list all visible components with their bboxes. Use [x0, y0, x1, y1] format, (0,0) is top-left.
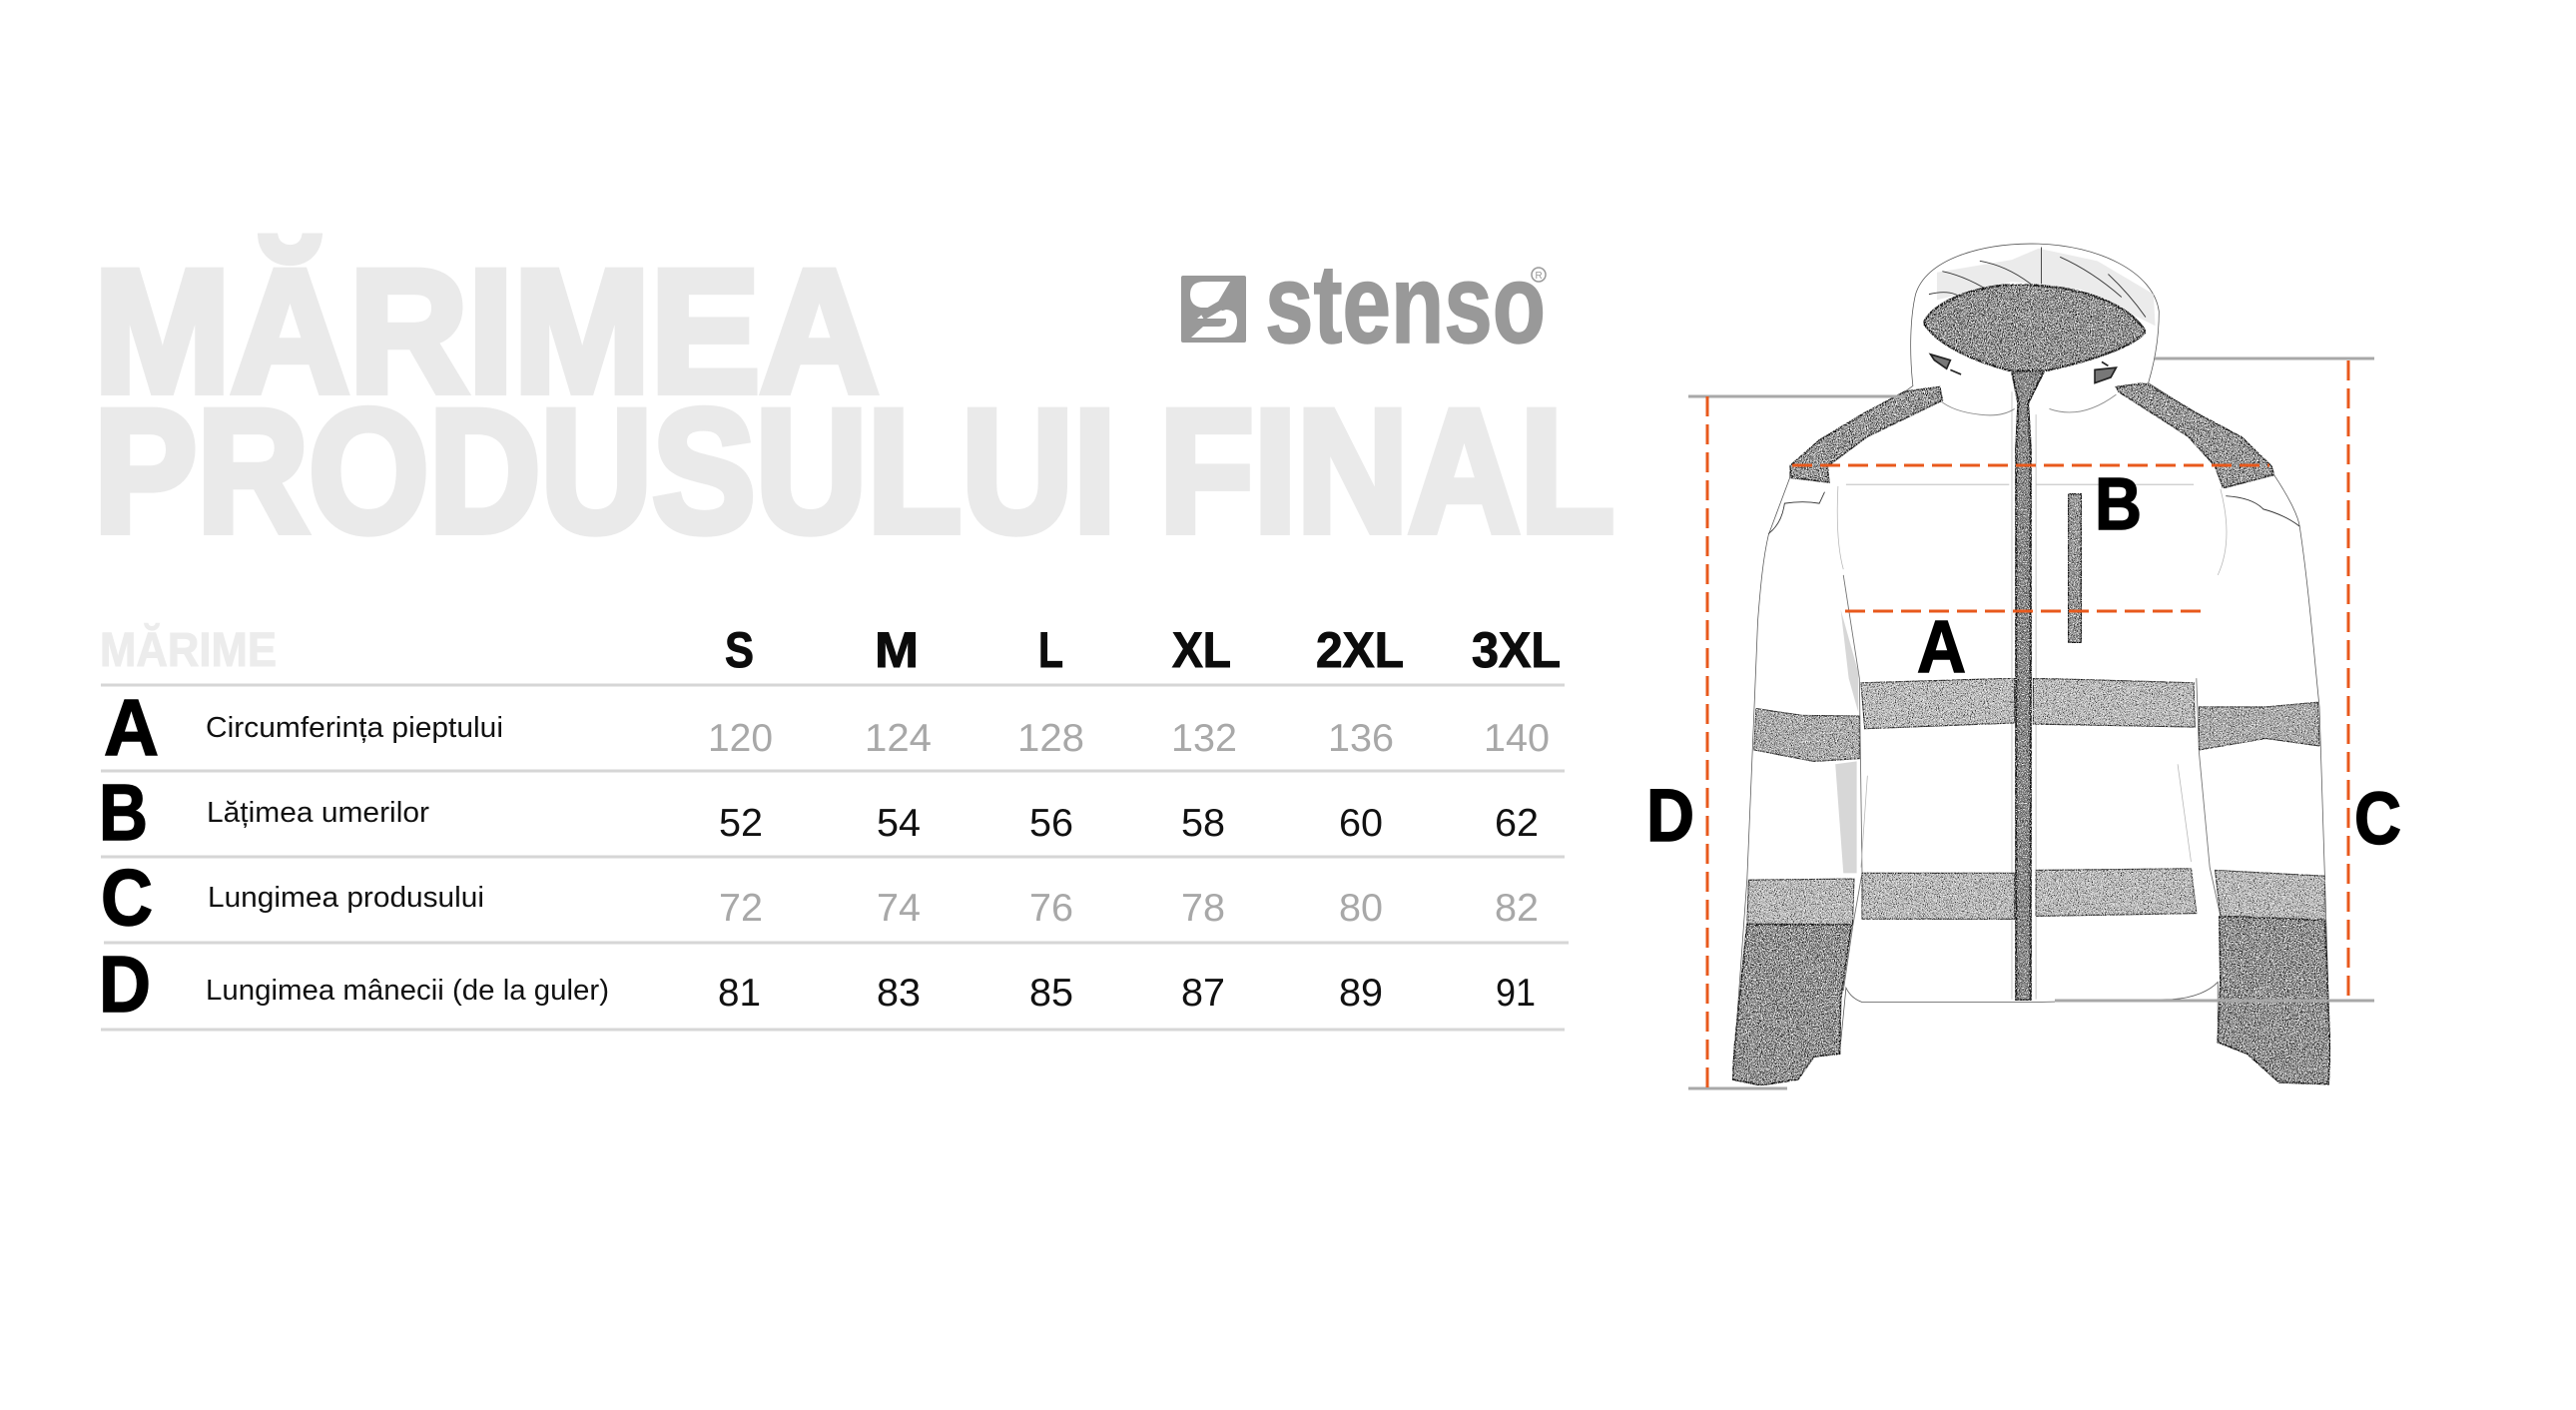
row C: product length: [101, 853, 1539, 942]
table header: M: [875, 622, 919, 678]
registered mark: R: [1536, 271, 1543, 282]
hood toggles: [1931, 354, 2116, 383]
row A: chest circumference: 124: [865, 717, 932, 760]
row D: sleeve length: 89: [1339, 972, 1383, 1015]
size table: [99, 622, 1569, 1030]
row D: sleeve length: [99, 940, 1536, 1029]
side shading: [1835, 609, 1858, 873]
table header: L: [1038, 622, 1063, 678]
dimension D dashed arrow: [1705, 396, 1709, 1088]
row B: shoulder width: Lățimea umerilor: [207, 797, 429, 829]
row A: chest circumference: 140: [1484, 717, 1550, 760]
knit cuffs: [1732, 916, 2330, 1085]
row B: shoulder width: 60: [1339, 802, 1383, 845]
title: [94, 235, 1614, 569]
row A: chest circumference: 136: [1328, 717, 1394, 760]
table header: S: [725, 622, 754, 678]
dimension guide lines: [1688, 358, 2374, 1088]
title: PRODUSULUI FINAL: [94, 374, 1614, 569]
row A: chest circumference: [104, 683, 1550, 772]
title: MĂRIMEA: [94, 235, 879, 429]
shoulder panels: [1790, 383, 2273, 488]
row C: product length: Lungimea produsului: [208, 882, 484, 914]
registered mark: [1532, 268, 1546, 282]
row D: sleeve length: 85: [1029, 972, 1073, 1015]
logo wordmark: stenso: [1265, 242, 1546, 366]
center zipper: [2012, 371, 2044, 1001]
dimension B dashed arrow: [1792, 463, 2269, 467]
jacket label D: D: [1646, 774, 1694, 857]
row C: product length: 72: [719, 887, 763, 930]
row B: shoulder width: 62: [1495, 802, 1539, 845]
row B: shoulder width: 54: [877, 802, 921, 845]
chest pocket zip: [2068, 493, 2082, 643]
table rules: [101, 685, 1569, 1030]
table header: XL: [1172, 622, 1231, 678]
row C: product length: 76: [1029, 887, 1073, 930]
jacket drawing: [1732, 244, 2330, 1085]
jacket label C: C: [2354, 777, 2401, 860]
table header: 3XL: [1472, 622, 1561, 678]
row C: product length: 78: [1181, 887, 1225, 930]
row C: product length: 82: [1495, 887, 1539, 930]
row A: chest circumference: 128: [1017, 717, 1084, 760]
jacket label A: A: [1917, 605, 1966, 688]
row D: sleeve length: 87: [1181, 972, 1225, 1015]
reflective bands: [1747, 678, 2324, 925]
row D: sleeve length: 91: [1496, 972, 1536, 1015]
row B: shoulder width: B: [99, 768, 148, 857]
row C: product length: 80: [1339, 887, 1383, 930]
row A: chest circumference: 120: [708, 717, 773, 760]
table header: MĂRIME: [100, 623, 277, 677]
table header: 2XL: [1316, 622, 1404, 678]
logo mark: [1181, 276, 1246, 343]
dimension C dashed arrow: [2346, 360, 2350, 999]
row C: product length: C: [101, 853, 153, 942]
row D: sleeve length: Lungimea mânecii (de la guler): [206, 975, 609, 1007]
row A: chest circumference: A: [104, 683, 159, 772]
row B: shoulder width: [99, 768, 1539, 857]
row D: sleeve length: 81: [718, 972, 761, 1015]
row B: shoulder width: 56: [1029, 802, 1073, 845]
dimension A dashed arrow: [1845, 609, 2206, 613]
row D: sleeve length: D: [99, 940, 151, 1029]
row B: shoulder width: 58: [1181, 802, 1225, 845]
row B: shoulder width: 52: [719, 802, 763, 845]
row A: chest circumference: 132: [1171, 717, 1237, 760]
table header: [100, 622, 1561, 678]
logo: stenso: [1181, 242, 1546, 366]
jacket outline: [1732, 244, 2330, 1085]
hood lining: [1924, 285, 2146, 371]
jacket label B: B: [2095, 462, 2142, 545]
hood folds: [1937, 249, 2156, 326]
row A: chest circumference: Circumferința pieptului: [206, 712, 503, 744]
row C: product length: 74: [877, 887, 921, 930]
row D: sleeve length: 83: [877, 972, 921, 1015]
